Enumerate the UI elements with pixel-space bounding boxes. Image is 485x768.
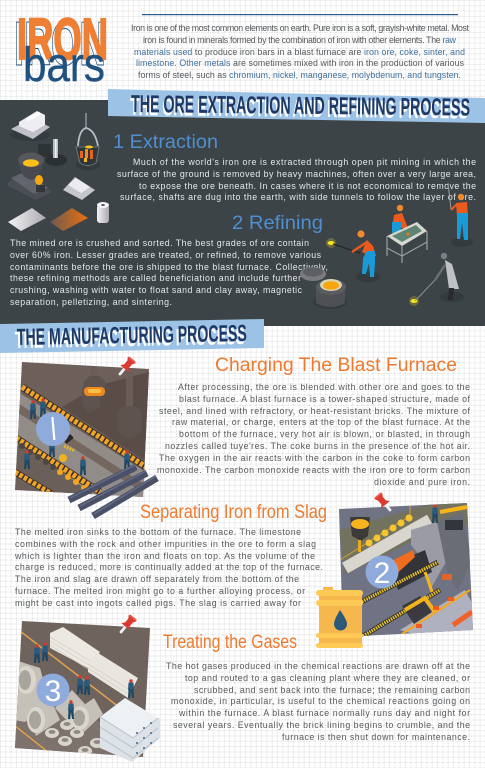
text block: treating bbox=[166, 661, 470, 742]
text block: charging: raw material, or charge, enters at the top of the blast furnace. At the bbox=[172, 417, 470, 427]
text block: treating: top and routed to a gas cleaning plant where they are cleaned, or bbox=[185, 673, 470, 683]
text block: charging: steel, and lined with refractory, or heat-resistant bricks. The mixture of bbox=[159, 406, 471, 416]
illustration: blast furnace factory bbox=[15, 362, 149, 497]
heading: Separating Iron from Slag: Separating Iron from Slag bbox=[140, 502, 327, 523]
panel: ore extraction and refining bbox=[0, 100, 485, 326]
text block: separating: which is lighter than the iron and floats on top. As the volume of the bbox=[14, 551, 315, 561]
furnace two bbox=[126, 376, 133, 406]
banner: the manufacturing process: THE MANUFACTURING PROCESS bbox=[15, 323, 245, 353]
furnace one bbox=[82, 376, 105, 396]
text block: extraction: surface of the ground is removed by heavy machines, often over a very large area, bbox=[117, 169, 476, 179]
icon: pedestal with silver rod bbox=[38, 139, 67, 166]
illustration: worker in grey coat bbox=[409, 253, 464, 306]
text block: charging: bottom of the furnace, very hot air is blown, or blasted, in through bbox=[179, 429, 470, 439]
badge: number 3 bbox=[36, 674, 70, 708]
text block: separating: combines with the rock and other impurities in the ore to form a slag bbox=[15, 539, 316, 549]
title: Iron Bars logo: bars bbox=[23, 39, 105, 92]
intro text block: forms of steel, such as chromium, nickel, manganese, molybdenum, and tungsten. bbox=[138, 70, 461, 80]
title: Iron Bars logo: IRON bbox=[17, 7, 108, 72]
icon: steel roll bbox=[97, 202, 109, 223]
icon: stacked concrete slabs bbox=[100, 698, 160, 762]
intro text block: limestone. Other metals are sometimes mixed with iron in the production of various bbox=[136, 58, 465, 68]
heading: Treating the Gases: Treating the Gases bbox=[163, 632, 297, 653]
text block: separating bbox=[14, 527, 323, 608]
text block: extraction bbox=[117, 157, 476, 202]
intro rule line bbox=[142, 14, 458, 15]
illustration: automated steel line bbox=[339, 503, 473, 636]
text block: charging bbox=[157, 382, 471, 487]
text block: separating: The iron and slag are drawn off separately from the bottom of the bbox=[15, 574, 299, 584]
pipes bbox=[15, 660, 103, 736]
text block: charging: The oxygen in the air reacts with the carbon in the coke to form carbon bbox=[159, 453, 470, 463]
illustration: concrete pipe yard bbox=[15, 621, 150, 757]
text block: treating: The hot gases produced in the chemical reactions are drawn off at the bbox=[166, 661, 470, 671]
text block: treating: monoxide, in particular, is useful to the chemical reactions going on bbox=[171, 696, 470, 706]
icon: steel bars bbox=[69, 465, 157, 516]
banner: the manufacturing process bbox=[0, 319, 264, 353]
heading: Charging The Blast Furnace: Charging The Blast Furnace bbox=[215, 355, 457, 376]
illustration: worker at inspection table bbox=[387, 205, 427, 263]
text block: separating: charge is reduced, more is continually added at the top of the furnace. bbox=[15, 562, 323, 572]
text block: refining: The mined ore is crushed and sorted. The best grades of ore contain bbox=[10, 238, 309, 248]
text block: charging: dioxide and pure iron. bbox=[374, 477, 470, 487]
illustration: worker with rod bbox=[326, 230, 380, 282]
icon: red pin 1 bbox=[116, 356, 137, 378]
intro text block bbox=[131, 23, 470, 80]
heading: 1 Extraction: 1 Extraction bbox=[113, 132, 218, 153]
text block: refining: separation, pelletizing, and sintering. bbox=[10, 297, 172, 307]
text block: treating: within the furnace. A blast furnace normally runs day and night for bbox=[178, 708, 470, 718]
intro text block: materials used to produce iron bars in a blast furnace are iron ore, coke, sinter, and bbox=[134, 47, 465, 57]
text block: charging: blast furnace. A blast furnace is a tower-shaped structure, made of bbox=[179, 394, 471, 404]
text block: separating: furnace. The melted iron might go to a further alloying process, or bbox=[15, 586, 305, 596]
text block: separating: The melted iron sinks to the bottom of the furnace. The limestone bbox=[15, 527, 301, 537]
text block: refining bbox=[10, 238, 328, 307]
illustration: molten crucible and lid bbox=[300, 267, 347, 309]
intro text block: Iron is one of the most common elements on earth. Pure iron is a soft, grayish-white metal. Most bbox=[131, 23, 470, 33]
title: Iron Bars logo bbox=[14, 7, 108, 92]
text block: refining: crushing, washing with water to float sand and clay away, magnetic bbox=[10, 285, 303, 295]
text block: extraction: to expose the ore beneath. In cases where it is not economical to remove the bbox=[139, 181, 476, 191]
illustration: worker standing with tool bbox=[448, 183, 473, 247]
icon: stacked metal ingots bbox=[10, 111, 50, 141]
text block: treating: several years. Eventually the brick lining begins to crumble, and the bbox=[173, 720, 470, 730]
icon: red pin 3 bbox=[117, 614, 138, 636]
icon: crucible pouring molten metal bbox=[8, 152, 52, 200]
text block: treating: scrubbed, and sent back into the furnace; the remaining carbon bbox=[194, 685, 470, 695]
text block: refining: contaminants before the ore is shipped to the blast furnace. Collectively, bbox=[10, 262, 328, 272]
text block: separating: might be cast into ingots called pigs. The slag is carried away for bbox=[15, 598, 301, 608]
icon: copper plate bbox=[50, 208, 88, 231]
title: Iron Bars logo: IRON bbox=[14, 10, 106, 79]
icon: steel plate bbox=[8, 208, 46, 231]
text block: charging: After processing, the ore is blended with other ore and goes to the bbox=[178, 382, 470, 392]
text block: refining: these refining methods are called beneficiation and include further bbox=[10, 273, 301, 283]
icon: basket of hot ore on hook bbox=[76, 113, 100, 170]
icon: red pin 2 bbox=[373, 492, 394, 514]
text block: treating: furnace is then shut down for maintenance. bbox=[282, 732, 470, 742]
intro text block: iron is found in minerals formed by the combination of iron with other elements. The raw bbox=[143, 35, 457, 45]
badge: number 2 bbox=[366, 556, 398, 590]
banner: the manufacturing process: THE MANUFACTURING PROCESS bbox=[17, 320, 247, 350]
badge: number 3: 3 bbox=[45, 675, 61, 708]
icon: silver ingot bbox=[63, 177, 95, 200]
badge: number 1 bbox=[36, 412, 70, 446]
text block: charging: monoxide. The carbon monoxide reacts with the iron ore to form carbon bbox=[157, 465, 470, 475]
text block: extraction: surface, shafts are dug into the earth, with side tunnels to follow the layer of ore. bbox=[120, 192, 476, 202]
icon: oil barrel bbox=[316, 587, 363, 648]
text block: refining: over 60% iron. Lesser grades are treated, or refined, to remove various bbox=[10, 250, 322, 260]
text block: charging: nozzles called tuye'res. The coke burns in the presence of the hot air. bbox=[165, 441, 470, 451]
heading: 2 Refining: 2 Refining bbox=[232, 213, 323, 234]
badge: number 2: 2 bbox=[374, 557, 390, 590]
text block: extraction: Much of the world's iron ore is extracted through open pit mining in which the bbox=[133, 157, 476, 167]
